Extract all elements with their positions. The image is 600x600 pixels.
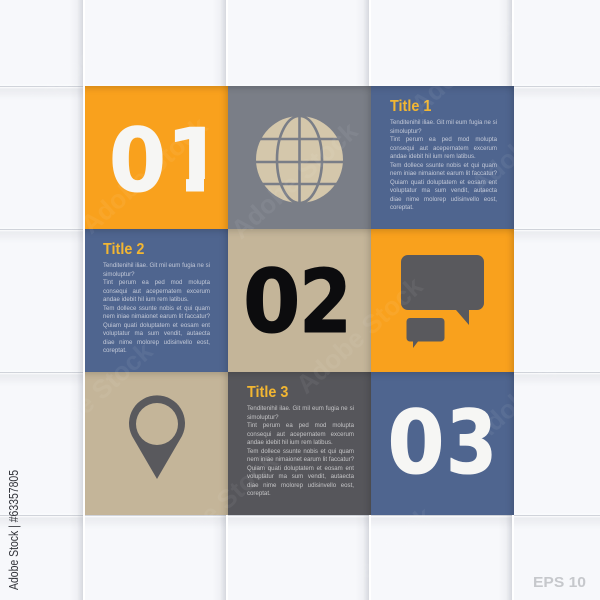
- text block: title 2: simoluptur?: [103, 271, 134, 278]
- number 03: [388, 392, 497, 494]
- watermark: Adobe Stock: [75, 111, 213, 239]
- text block: title 2: [103, 262, 210, 354]
- number 03: 3: [446, 392, 497, 494]
- panel: blue 03: [371, 372, 514, 515]
- number 02: 2: [299, 251, 352, 353]
- text block: title 3: nem iniae nimaionet earum lit faccatur?: [247, 456, 354, 463]
- text block: title 2: andae idebit hil ium rem latibus.: [103, 296, 189, 303]
- text block: title 3: simoluptur?: [247, 414, 278, 421]
- panel: title 3: [228, 372, 371, 515]
- text block: title 1: andae idebit hil ium rem latibus.: [390, 153, 476, 160]
- stock credit: Adobe Stock | #63357805: [7, 470, 21, 590]
- number 03: 0: [388, 392, 444, 494]
- panel: title 2: [85, 229, 228, 372]
- text block: title 2: coreptat.: [103, 347, 127, 354]
- number 01: 1: [166, 110, 224, 212]
- watermark: Adobe Stock: [225, 116, 363, 244]
- text block: title 3: Quiam quati doluptatem et eosam ent: [247, 465, 354, 472]
- text block: title 2: Tenditenihil iliae. Git mil eum fugia ne si: [103, 262, 210, 269]
- text block: title 3: diae nime molorep udisinvello eost,: [247, 482, 354, 489]
- watermark: Adobe Stock: [465, 71, 600, 199]
- text block: title 3: andae idebit hil ium rem latibus.: [247, 439, 333, 446]
- text block: title 1: nem iniae nimaionet earum lit faccatur?: [390, 170, 497, 177]
- panel: tan pin: [85, 372, 228, 515]
- text block: title 3: coreptat.: [247, 490, 271, 497]
- watermark: Adobe Stock: [290, 271, 428, 399]
- panel: title 1: [371, 86, 514, 229]
- text block: title 1: [390, 119, 497, 211]
- panel: orange speech bubbles: [371, 229, 514, 372]
- watermark: Adobe Stock: [20, 336, 158, 464]
- text block: title 1: coreptat.: [390, 204, 414, 211]
- watermark: Adobe Stock: [145, 446, 283, 574]
- number 01: 0: [109, 110, 166, 212]
- number 02: [243, 251, 352, 353]
- text block: title 1: Tenditenihil iliae. Git mil eum fugia ne si: [390, 119, 497, 126]
- text block: title 1: diae nime molorep udisinvello eost,: [390, 196, 497, 203]
- icon: map pin: [129, 395, 185, 479]
- text block: title 3: Tem dollece ssunte nobis et qui quam: [247, 448, 354, 455]
- text block: title 1: Tint perum ea ped mod molupta: [390, 136, 497, 143]
- text block: title 2: consequi aut acepernatem excerum: [103, 288, 210, 295]
- text block: title 3: Tenditenihil ilae. Git mil eum fugia ne si: [247, 405, 354, 412]
- EPS 10 label: EPS 10: [533, 575, 586, 591]
- panel: tan 02: [228, 229, 371, 372]
- watermark: Adobe Stock: [465, 321, 600, 449]
- number 02: 0: [243, 251, 300, 353]
- text block: title 2: diae nime molorep udisinvello eost,: [103, 339, 210, 346]
- text block: title 2: nem iniae nimaionet earum lit faccatur?: [103, 313, 210, 320]
- icon: speech bubbles: [401, 255, 484, 348]
- text block: title 2: Tint perum ea ped mod molupta: [103, 279, 210, 286]
- text block: title 3: voluptatur ma sum vendit, autaecta: [247, 473, 354, 480]
- text block: title 1: Quiam quati doluptatem et eosam ent: [390, 179, 497, 186]
- number 01: [109, 110, 205, 212]
- text block: title 3: [247, 405, 354, 497]
- panel: orange 01: [85, 86, 228, 229]
- text block: title 2: Tem dollece ssunte nobis et qui quam: [103, 305, 210, 312]
- heading: title 2: Title 2: [103, 241, 144, 258]
- text block: title 3: consequi aut acepernatem excerum: [247, 431, 354, 438]
- text block: title 2: Quiam quati doluptatem et eosam ent: [103, 322, 210, 329]
- text block: title 1: consequi aut acepernatem excerum: [390, 145, 497, 152]
- text block: title 1: simoluptur?: [390, 128, 422, 135]
- heading: title 1: Title 1: [390, 98, 431, 115]
- panel: globe: [228, 86, 371, 229]
- text block: title 1: Tem dollece ssunte nobis et qui quam: [390, 162, 497, 169]
- text block: title 2: voluptatur ma sum vendit, autaecta: [103, 330, 210, 337]
- icon: globe: [256, 116, 343, 202]
- heading: title 3: Title 3: [247, 384, 288, 401]
- text block: title 1: voluptatur ma sum vendit, autaecta: [390, 187, 497, 194]
- text block: title 3: Tint perum ea ped mod molupta: [247, 422, 354, 429]
